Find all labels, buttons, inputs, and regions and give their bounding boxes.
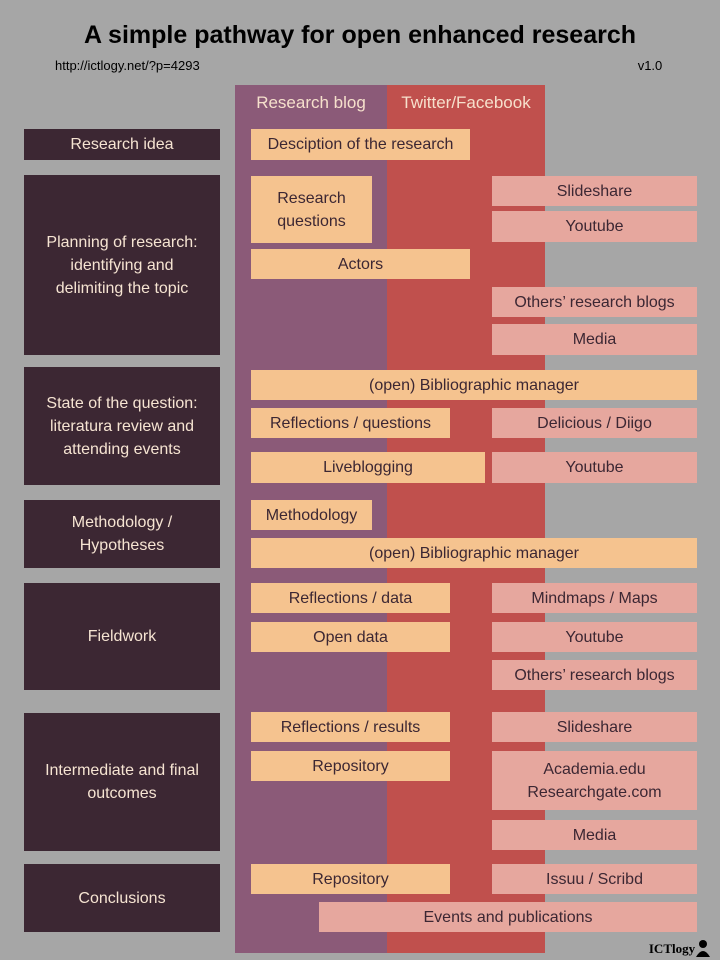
box: open data: Open data <box>313 628 388 646</box>
box: media 2: Media <box>573 826 616 844</box>
stage: state of the question: attending events <box>63 440 181 458</box>
logo: ICTlogy <box>649 940 695 956</box>
box: reflections questions: Reflections / questions <box>270 414 431 432</box>
box: delicious: Delicious / Diigo <box>537 414 652 432</box>
box: research questions: Research <box>277 190 346 206</box>
box: repository 2 <box>251 864 450 894</box>
box: others blogs <box>492 287 697 317</box>
stage: fieldwork: Fieldwork <box>88 628 156 645</box>
column: research blog: Research blog <box>256 93 366 112</box>
box: research questions <box>251 176 372 243</box>
box: reflections data <box>251 583 450 613</box>
title: A simple pathway for open enhanced research <box>84 20 636 48</box>
box: bibliographic manager <box>251 370 697 400</box>
stage: conclusions <box>24 864 220 932</box>
box: youtube 2 <box>492 452 697 483</box>
box: youtube 3: Youtube <box>565 628 624 646</box>
box: liveblogging <box>251 452 485 483</box>
column: twitter/facebook: Twitter/Facebook <box>401 93 531 112</box>
box: youtube 3 <box>492 622 697 652</box>
box: description <box>251 129 470 160</box>
box: media 2 <box>492 820 697 850</box>
logo <box>649 940 710 957</box>
box: academia <box>492 751 697 810</box>
box: mindmaps <box>492 583 697 613</box>
url: http://ictlogy.net/?p=4293 <box>55 58 200 72</box>
box: events: Events and publications <box>424 908 592 926</box>
box: slideshare <box>492 176 697 206</box>
version: v1.0 <box>638 58 662 72</box>
box: bibliographic manager: (open) Bibliographic manager <box>369 376 579 394</box>
box: actors: Actors <box>338 256 383 272</box>
stage: state of the question: State of the question: <box>46 394 198 412</box>
box: methodology <box>251 500 372 530</box>
box: academia: Academia.edu <box>543 760 646 778</box>
stage: state of the question: literatura review and <box>50 418 194 434</box>
box: issuu: Issuu / Scribd <box>546 870 643 888</box>
box: open data <box>251 622 450 652</box>
stage: methodology: Methodology / <box>72 514 172 531</box>
box: others blogs 2: Others’ research blogs <box>514 666 675 684</box>
box: youtube: Youtube <box>565 218 624 235</box>
stage: state of the question <box>24 367 220 485</box>
stage: outcomes: outcomes <box>87 785 157 802</box>
box: media <box>492 324 697 355</box>
stage: planning: Planning of research: <box>46 234 198 250</box>
box: repository <box>251 751 450 781</box>
box: youtube 2: Youtube <box>565 459 624 476</box>
box: others blogs: Others’ research blogs <box>514 294 675 310</box>
box: slideshare 2: Slideshare <box>557 718 632 736</box>
box: research questions: questions <box>277 212 346 230</box>
box: reflections results: Reflections / results <box>281 718 420 736</box>
box: academia: Researchgate.com <box>527 784 662 800</box>
box: delicious <box>492 408 697 438</box>
stage: research idea: Research idea <box>70 136 174 153</box>
box: reflections data: Reflections / data <box>289 590 412 606</box>
box: repository 2: Repository <box>312 870 389 888</box>
stage: planning <box>24 175 220 355</box>
box: events <box>319 902 697 932</box>
stage: planning: delimiting the topic <box>56 280 188 296</box>
stage: outcomes: Intermediate and final <box>45 762 199 779</box>
box: reflections results <box>251 712 450 742</box>
box: actors <box>251 249 470 279</box>
box: bibliographic manager 2: (open) Bibliographic manager <box>369 544 579 562</box>
stage: planning: identifying and <box>70 256 174 274</box>
box: reflections questions <box>251 408 450 438</box>
box: mindmaps: Mindmaps / Maps <box>531 590 658 606</box>
box: repository: Repository <box>312 758 389 774</box>
box: slideshare 2 <box>492 712 697 742</box>
box: others blogs 2 <box>492 660 697 690</box>
box: liveblogging: Liveblogging <box>323 459 413 476</box>
stage: research idea <box>24 129 220 160</box>
column: research blog <box>235 85 387 953</box>
box: methodology: Methodology <box>266 506 357 524</box>
box: youtube <box>492 211 697 242</box>
box: slideshare: Slideshare <box>557 182 632 200</box>
box: description: Desciption of the research <box>268 136 453 153</box>
stage: methodology: Hypotheses <box>80 537 164 554</box>
stage: outcomes <box>24 713 220 851</box>
stage: methodology <box>24 500 220 568</box>
box: bibliographic manager 2 <box>251 538 697 568</box>
column: twitter/facebook <box>387 85 545 953</box>
box: media: Media <box>573 331 616 348</box>
box: issuu <box>492 864 697 894</box>
stage: conclusions: Conclusions <box>78 890 166 906</box>
stage: fieldwork <box>24 583 220 690</box>
